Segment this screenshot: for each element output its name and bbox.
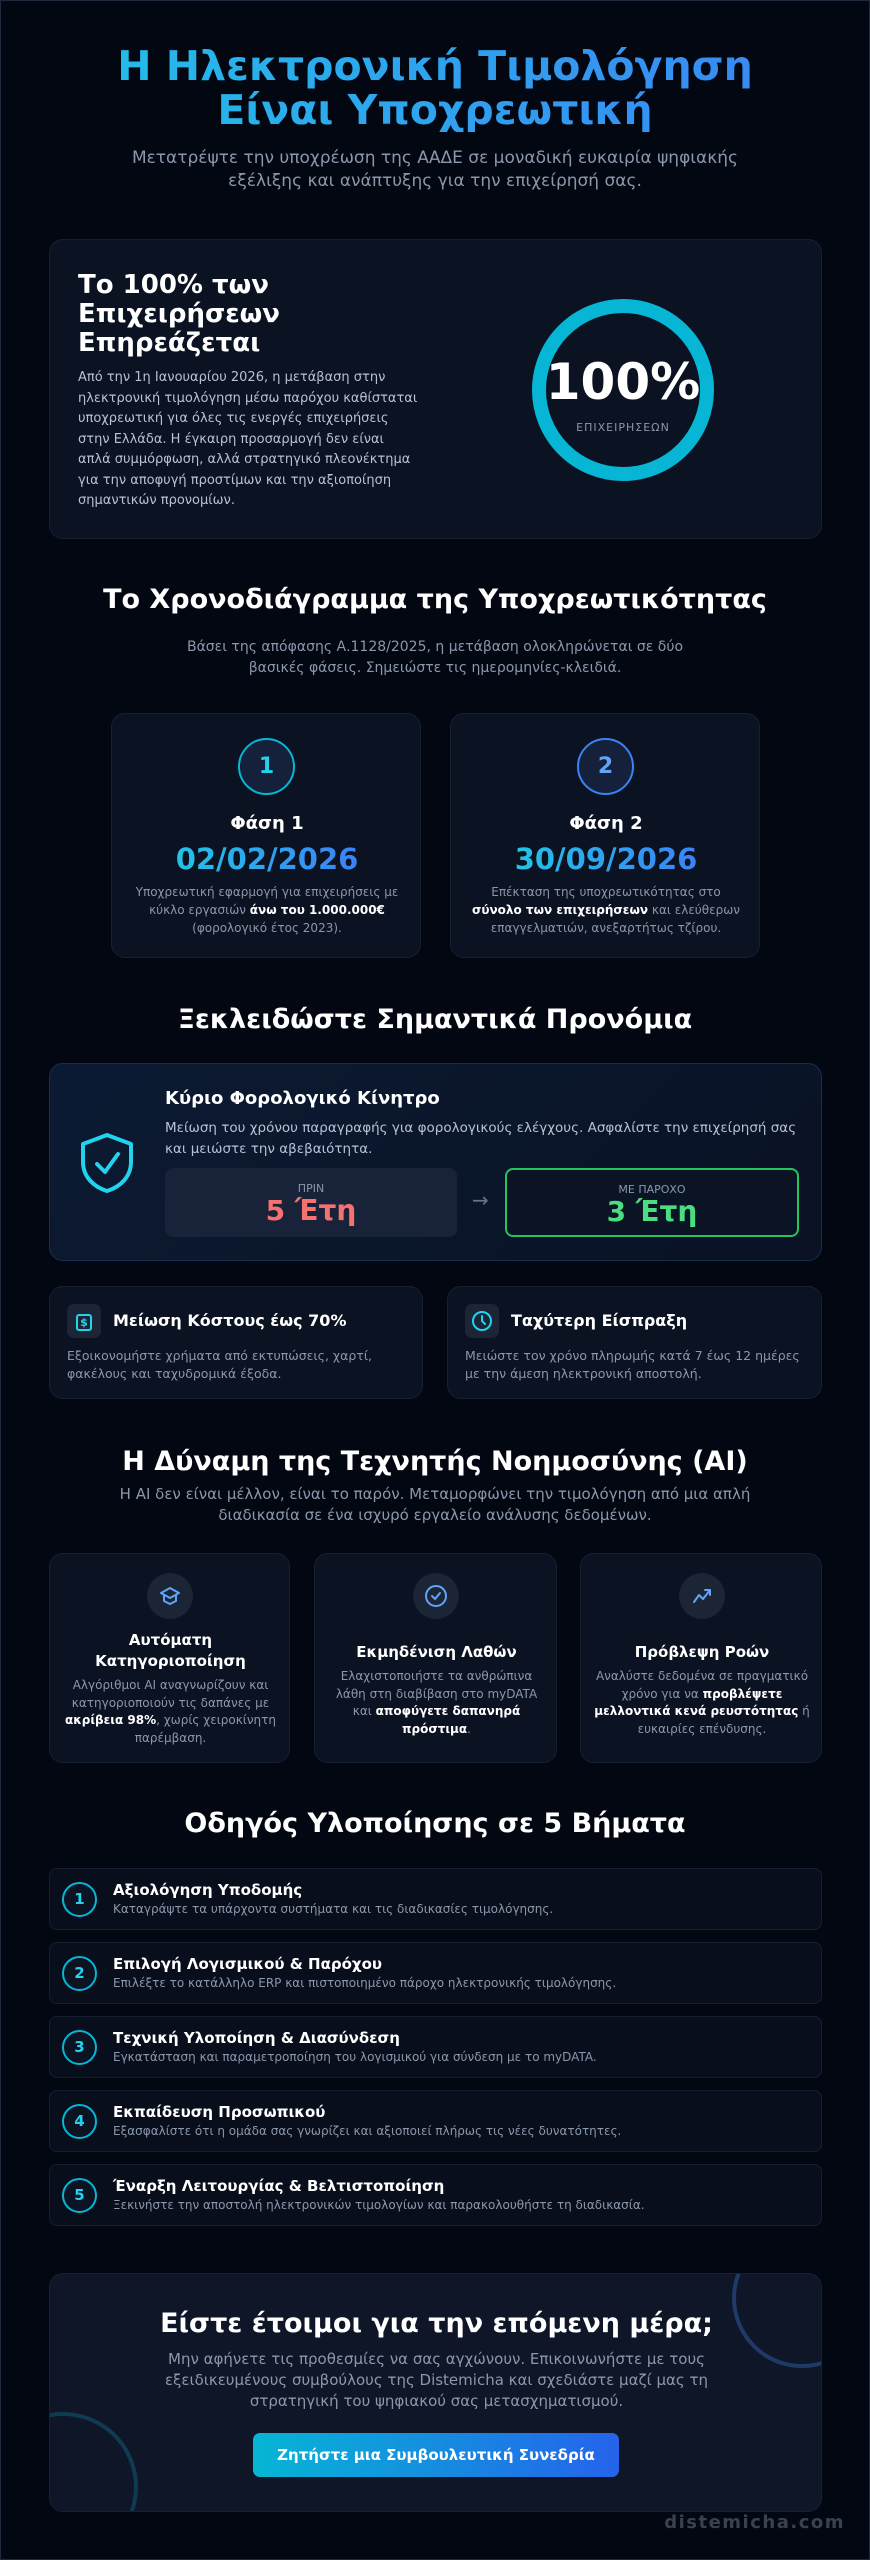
text: Αναλύστε δεδομένα σε πραγματικό χρόνο για να προβλέψετε μελλοντικά κενά ρευστότητας ή ευκαιρίες επένδυσης. <box>594 1669 810 1736</box>
text: AI intro: Η AI δεν είναι μέλλον, είναι το παρόν. Μεταμορφώνει την τιμολόγηση από μια απλή διαδικασία σε ένα ισχυρό εργαλείο ανάλυσης δεδομένων. <box>120 1485 750 1524</box>
panel: call to action <box>49 2273 822 2512</box>
panel: 100% impact <box>49 239 822 539</box>
text: impact description: Από την 1η Ιανουαρίου 2026, η μετάβαση στην ηλεκτρονική τιμολόγηση μέσω παρόχου καθίσταται υποχρεωτική για όλες τις ενεργές επιχειρήσεις στην Ελλάδα. Η έγκαιρη προσαρμογή δεν είναι απλά συμμόρφωση, αλλά στρατηγικό πλεονέκτημα για την αποφυγή προστίμων και την αξιοποίηση σημαντικών προνομίων. <box>78 370 417 508</box>
panel: tax incentive <box>49 1063 822 1261</box>
icon: graduation cap <box>147 1573 193 1619</box>
footer: brand: distemicha.com <box>664 2512 845 2533</box>
step 1: Αξιολόγηση Υποδομής <box>113 1881 302 1899</box>
step 5: Έναρξη Λειτουργίας & Βελτιστοποίηση <box>113 2177 444 2195</box>
button: Ζητήστε μια Συμβουλευτική Συνεδρία <box>277 2446 595 2464</box>
text: phase 1: Υποχρεωτική εφαρμογή για επιχειρήσεις με κύκλο εργασιών άνω του 1.000.000€ (φορολογικό έτος 2023). <box>136 885 398 935</box>
heading: phase 1: Φάση 1 <box>230 813 304 834</box>
icon: money: $ <box>80 1316 88 1329</box>
panel: flow forecasting <box>580 1553 822 1763</box>
panel: phase 1 <box>111 713 421 958</box>
step 4: 4 <box>74 2112 85 2130</box>
panel: faster collection <box>447 1286 822 1399</box>
panel: cost reduction <box>49 1286 423 1399</box>
arrow: → <box>472 1188 489 1212</box>
text: CTA: Μην αφήνετε τις προθεσμίες να σας αγχώνουν. Επικοινωνήστε με τους εξειδικευμένους συμβούλους της Distemicha και σχεδιάστε μαζί μας τη στρατηγική του ψηφιακού σας μετασχηματισμού. <box>165 2350 708 2410</box>
heading <box>95 1631 246 1670</box>
step 3: Εγκατάσταση και παραμετροποίηση του λογισμικού για σύνδεση με το myDATA. <box>113 2050 597 2064</box>
icon: trend <box>679 1573 725 1619</box>
step 2: Επιλέξτε το κατάλληλο ERP και πιστοποιημένο πάροχο ηλεκτρονικής τιμολόγησης. <box>113 1976 616 1990</box>
text: timeline intro: Βάσει της απόφασης Α.1128/2025, η μετάβαση ολοκληρώνεται σε δύο βασικές φάσεις. Σημειώστε τις ημερομηνίες-κλειδιά. <box>187 639 683 676</box>
icon: number 2 <box>577 738 634 795</box>
icon: number 1 <box>238 738 295 795</box>
box: with provider <box>505 1168 799 1237</box>
box: with provider: ΜΕ ΠΑΡΟΧΟ <box>618 1183 686 1196</box>
title: Η Ηλεκτρονική Τιμολόγηση <box>117 42 753 90</box>
date: phase 1: 02/02/2026 <box>176 842 358 876</box>
chart: 100% ring: ΕΠΙΧΕΙΡΗΣΕΩΝ <box>576 421 670 434</box>
step 1: Καταγράψτε τα υπάρχοντα συστήματα και τις διαδικασίες τιμολόγησης. <box>113 1902 553 1916</box>
step 5: 5 <box>74 2186 85 2204</box>
step 3: Τεχνική Υλοποίηση & Διασύνδεση <box>113 2029 400 2047</box>
panel: AI categorisation <box>49 1553 290 1763</box>
step 4 <box>49 2090 822 2152</box>
icon: shield <box>81 1133 133 1193</box>
step 1 <box>49 1868 822 1930</box>
heading: AI: Η Δύναμη της Τεχνητής Νοημοσύνης (AI) <box>122 1446 748 1477</box>
step 5: Ξεκινήστε την αποστολή ηλεκτρονικών τιμολογίων και παρακολουθήστε τη διαδικασία. <box>113 2198 645 2212</box>
step 5 <box>49 2164 822 2226</box>
icon: check circle <box>413 1573 459 1619</box>
heading: cost: Μείωση Κόστους έως 70% <box>113 1311 346 1330</box>
heading: CTA: Είστε έτοιμοι για την επόμενη μέρα; <box>160 2308 713 2339</box>
text: tax incentive: Μείωση του χρόνου παραγραφής για φορολογικούς ελέγχους. Ασφαλίστε την επιχείρησή σας και μειώστε την αβεβαιότητα. <box>165 1120 796 1157</box>
icon: number 1: 1 <box>259 754 274 779</box>
text: phase 2: Επέκταση της υποχρεωτικότητας στο σύνολο των επιχειρήσεων και ελεύθερων επαγγελματιών, ανεξαρτήτως τζίρου. <box>472 885 740 935</box>
icon: money <box>67 1304 101 1338</box>
heading: 5 steps: Οδηγός Υλοποίησης σε 5 Βήματα <box>184 1808 686 1839</box>
text: Ελαχιστοποιήστε τα ανθρώπινα λάθη στη διαβίβαση στο myDATA και αποφύγετε δαπανηρά πρόστιμα. <box>336 1669 537 1736</box>
text: faster: Μειώστε τον χρόνο πληρωμής κατά 7 έως 12 ημέρες με την άμεση ηλεκτρονική αποστολή. <box>465 1348 800 1381</box>
step 2: Επιλογή Λογισμικού & Παρόχου <box>113 1955 382 1973</box>
subtitle: Μετατρέψτε την υποχρέωση της ΑΑΔΕ σε μοναδική ευκαιρία ψηφιακής εξέλιξης και ανάπτυξης για την επιχείρησή σας. <box>132 148 738 191</box>
chart: 100% ring <box>532 299 714 481</box>
icon: number 2: 2 <box>598 754 613 779</box>
step 2: 2 <box>74 1964 85 1982</box>
step 1: 1 <box>74 1890 85 1908</box>
chart: 100% ring: 100% <box>546 353 700 411</box>
date: phase 2: 30/09/2026 <box>515 842 697 876</box>
title: Είναι Υποχρεωτική <box>217 86 653 134</box>
button <box>253 2433 619 2477</box>
box: with provider: 3 Έτη <box>607 1195 697 1228</box>
text: Αλγόριθμοι AI αναγνωρίζουν και κατηγοριοποιούν τις δαπάνες με ακρίβεια 98%, χωρίς χειροκίνητη παρέμβαση. <box>65 1678 276 1744</box>
heading: Κατηγοριοποίηση <box>95 1652 246 1670</box>
heading: Εκμηδένιση Λαθών <box>356 1643 517 1661</box>
box: before <box>165 1168 457 1237</box>
step 3: 3 <box>74 2038 85 2056</box>
icon: clock <box>465 1304 499 1338</box>
text: cost: Εξοικονομήστε χρήματα από εκτυπώσεις, χαρτί, φακέλους και ταχυδρομικά έξοδα. <box>67 1348 372 1381</box>
step 3 <box>49 2016 822 2078</box>
step 4: Εξασφαλίστε ότι η ομάδα σας γνωρίζει και αξιοποιεί πλήρως τις νέες δυνατότητες. <box>113 2124 621 2138</box>
step 2 <box>49 1942 822 2004</box>
panel: phase 2 <box>450 713 760 958</box>
box: before: ΠΡΙΝ <box>298 1182 324 1195</box>
step 4: Εκπαίδευση Προσωπικού <box>113 2103 325 2121</box>
box: before: 5 Έτη <box>266 1194 356 1227</box>
title <box>0 44 870 132</box>
heading: Αυτόματη <box>129 1631 212 1649</box>
heading: impact: Το 100% των Επιχειρήσεων Επηρεάζεται <box>78 270 280 358</box>
heading: phase 2: Φάση 2 <box>569 813 643 834</box>
heading: timeline: Το Χρονοδιάγραμμα της Υποχρεωτικότητας <box>103 584 767 615</box>
heading: Πρόβλεψη Ροών <box>635 1643 769 1661</box>
heading: tax incentive: Κύριο Φορολογικό Κίνητρο <box>165 1088 440 1109</box>
heading: faster: Ταχύτερη Είσπραξη <box>511 1311 687 1330</box>
panel: error elimination <box>314 1553 557 1763</box>
heading: benefits: Ξεκλειδώστε Σημαντικά Προνόμια <box>178 1004 692 1035</box>
